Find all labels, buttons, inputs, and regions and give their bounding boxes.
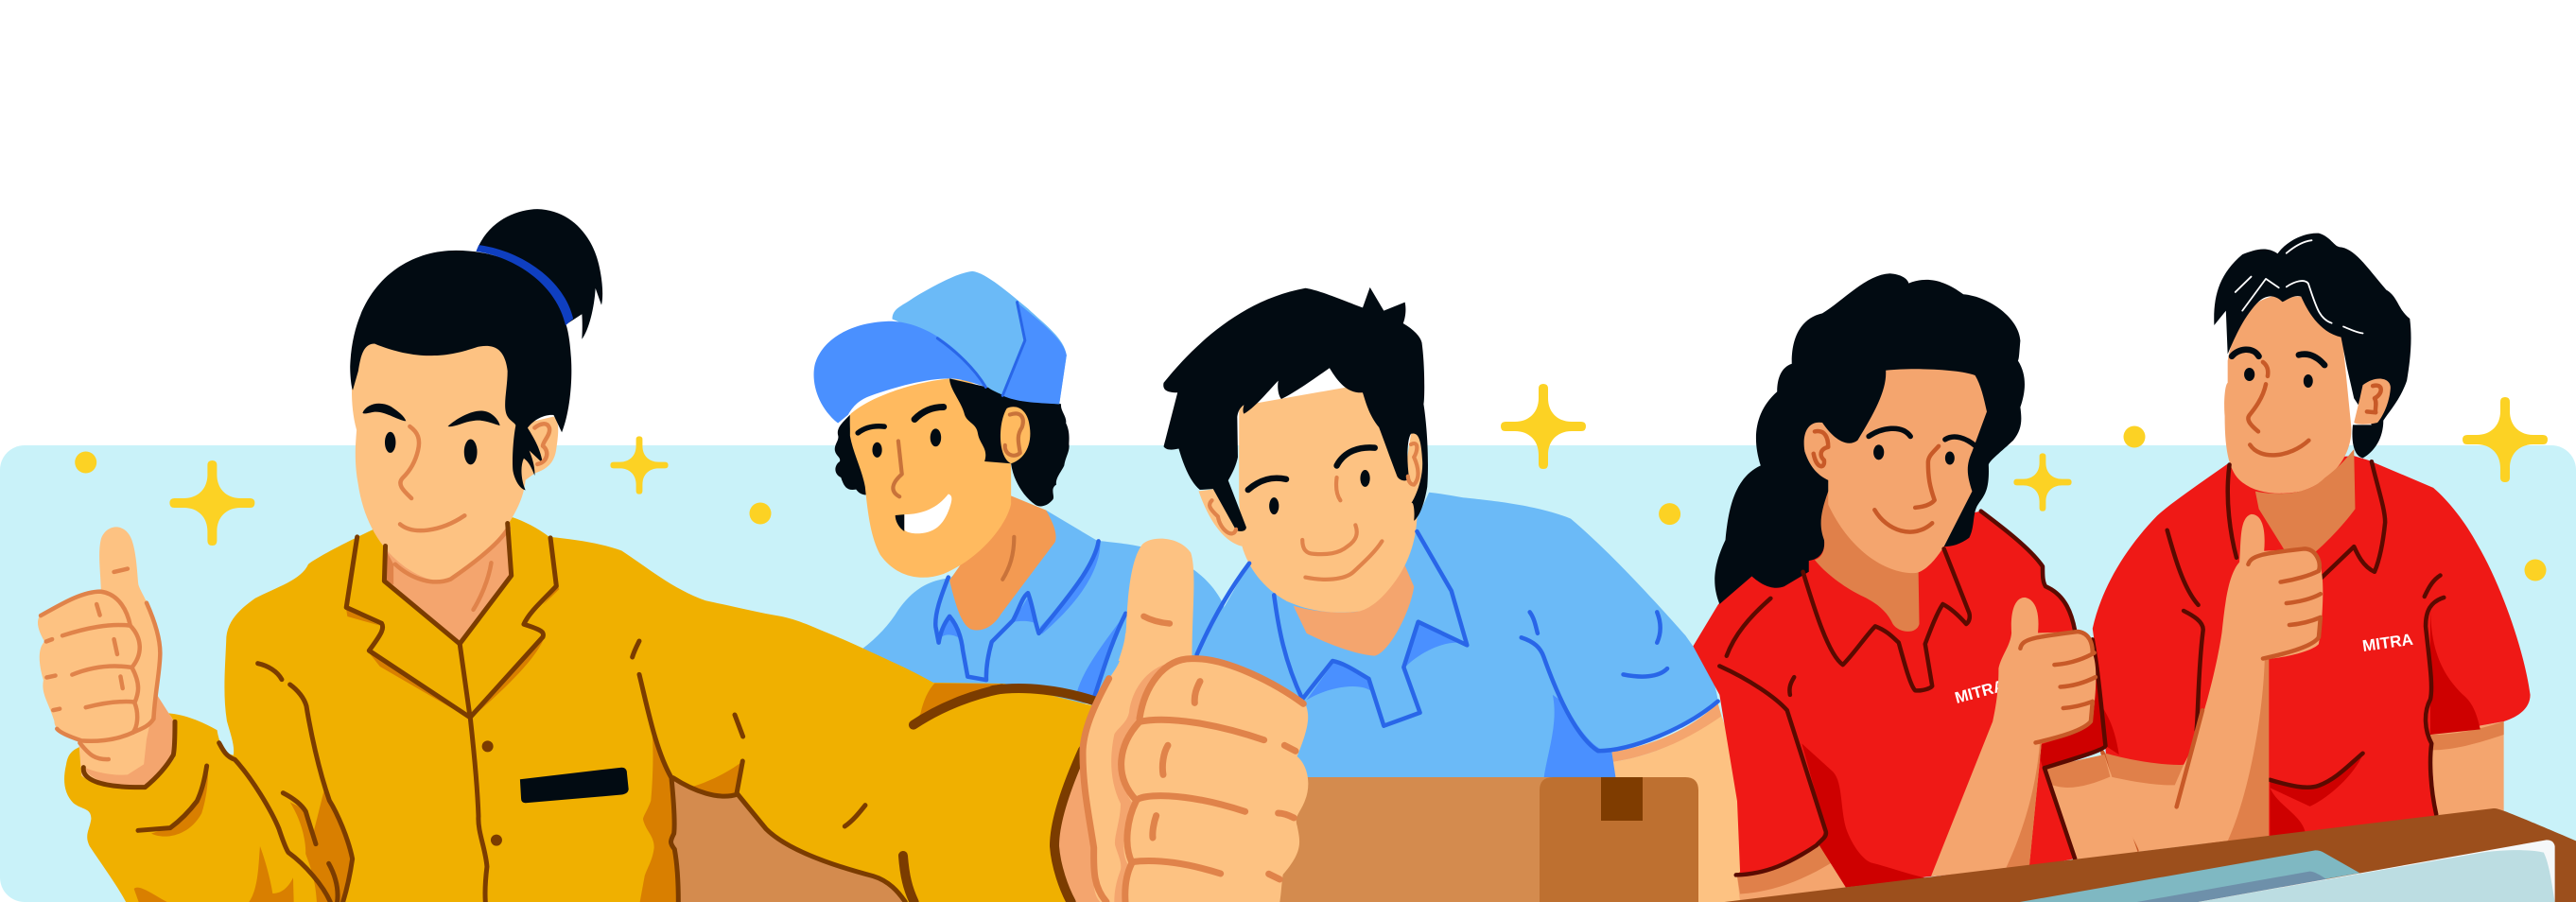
arm and fist	[1931, 598, 2096, 876]
eyes	[2244, 368, 2313, 388]
ear	[2354, 378, 2391, 425]
face	[1804, 369, 1987, 573]
hair band	[476, 245, 573, 325]
hair	[1163, 287, 1428, 531]
pale blue background panel	[0, 445, 2576, 902]
jacket buttons	[482, 740, 502, 846]
cardboard box	[1229, 777, 1698, 902]
sleeve underside	[1611, 703, 1721, 762]
hair	[350, 251, 571, 490]
nose, smile and ear lines	[1814, 431, 1939, 532]
eyes	[1873, 444, 1955, 464]
red shirt	[2093, 456, 2531, 850]
paper white	[2198, 840, 2555, 902]
ear right shade	[1401, 474, 1411, 516]
cap man face	[850, 378, 1011, 578]
shirt lines	[1197, 531, 1718, 751]
thumb	[1119, 539, 1193, 661]
shirt side shadow	[1543, 695, 1616, 780]
cuff outlines	[993, 688, 1095, 902]
eyebrows	[2232, 350, 2324, 365]
box front panel	[1540, 777, 1698, 902]
neck	[384, 523, 512, 644]
arm lines	[633, 641, 905, 902]
nose, smile and ear lines	[2248, 362, 2381, 455]
cap man neck	[949, 495, 1056, 631]
jacket extended arm	[757, 616, 1095, 902]
eyes	[1269, 470, 1370, 514]
finger lines	[2020, 632, 2096, 742]
collar lines	[346, 523, 556, 718]
cap man shirt	[847, 511, 1224, 703]
eyebrows	[1869, 428, 1976, 446]
wrist shade	[82, 694, 175, 789]
desk with glass display	[1725, 808, 2576, 902]
decorative sparkles and dots	[75, 384, 2548, 581]
shirt shadow	[1801, 743, 1928, 888]
wrist	[1053, 750, 1119, 902]
shirt	[1197, 493, 1718, 780]
person: woman in yellow jacket	[38, 209, 1308, 902]
cap seams	[937, 303, 1025, 395]
box seen under arm	[671, 779, 906, 902]
jacket shadows lower left	[134, 772, 353, 902]
lower sleeve cuff	[1737, 845, 1831, 894]
finger lines	[1083, 659, 1303, 902]
left cuff line	[83, 721, 175, 788]
cap man eyes	[872, 428, 941, 458]
side shadow	[640, 731, 679, 902]
jacket body	[64, 517, 851, 902]
cap side panel	[1002, 303, 1067, 404]
shirt lines	[2167, 461, 2444, 814]
box side	[1229, 777, 1551, 902]
face	[2224, 297, 2351, 494]
cap man hair left	[835, 415, 868, 494]
name tag	[520, 768, 629, 803]
sleeve cuff	[2430, 721, 2504, 750]
cuff shadow	[914, 684, 1002, 725]
cap man hair right	[949, 378, 1070, 506]
cap man eyebrows	[858, 407, 944, 433]
raised arm and thumb	[2101, 514, 2323, 852]
cap man nose and ear lines	[893, 413, 1023, 580]
arm shadow	[2006, 743, 2042, 867]
eyebrows	[1248, 447, 1375, 490]
fist shade	[1111, 662, 1179, 902]
lower left sleeve skin	[1737, 845, 1846, 902]
hair highlights	[2236, 240, 2363, 333]
lapel shadows	[346, 586, 559, 719]
eyebrows	[362, 404, 500, 426]
neck	[1294, 565, 1414, 656]
arm shadow	[2228, 659, 2269, 841]
woman arm and thumbs-up hand	[1931, 598, 2096, 876]
forearm cuff	[2043, 755, 2110, 788]
display lid	[2020, 850, 2359, 902]
cap man collar shadows	[941, 542, 1125, 699]
woman forearm behind	[2043, 755, 2138, 860]
nose, mouth and ear lines	[1210, 443, 1419, 580]
face	[1239, 385, 1418, 613]
jacket lines lower left	[138, 664, 487, 902]
pocket shadow	[2270, 755, 2363, 807]
neck shadow	[384, 546, 393, 584]
cap man collar lines	[935, 541, 1125, 697]
hair	[1714, 273, 2025, 604]
neck	[1815, 492, 1920, 632]
shirt shadow	[2430, 602, 2480, 735]
hair	[2214, 234, 2411, 458]
eyes	[385, 432, 478, 464]
hand lines	[2102, 548, 2321, 851]
cap visor	[814, 321, 985, 424]
big thumbs-up hand	[993, 539, 1308, 902]
paper tint	[2198, 850, 2555, 902]
logo: MITRA on woman shirt: MITRA	[1953, 677, 2007, 707]
left hand finger lines	[41, 569, 160, 759]
shirt fold shadow	[2270, 788, 2306, 837]
elbow shadow	[693, 763, 740, 796]
display inner	[2137, 872, 2326, 902]
ear right	[1405, 433, 1423, 504]
logo: MITRA on red shirt: MITRA	[2361, 631, 2414, 655]
person: man in blue shirt	[1163, 287, 1765, 902]
red shirt	[1693, 512, 2105, 888]
box tape	[1601, 777, 1643, 821]
shirt lines	[1719, 512, 2105, 875]
cap crown	[893, 271, 1067, 404]
sleeve shadow	[2037, 637, 2119, 768]
person: delivery man with blue cap	[814, 271, 1224, 703]
bun	[477, 209, 602, 339]
cap man ear	[1001, 407, 1030, 463]
thumb nail line	[1143, 616, 1170, 623]
thick fold lines	[903, 688, 1002, 902]
person: man in red shirt	[2093, 234, 2531, 852]
face	[352, 339, 558, 581]
right arm	[2430, 721, 2504, 827]
ear left	[1199, 489, 1242, 546]
neck	[2255, 449, 2355, 554]
collar shadows	[1307, 623, 1465, 700]
head and collar	[38, 209, 629, 803]
desk top	[1725, 808, 2576, 902]
jacket side and box patch	[633, 641, 1002, 902]
fist	[1083, 633, 1308, 902]
upper sleeve cuff	[2102, 753, 2184, 785]
person: woman in red shirt	[1693, 273, 2138, 902]
forearm	[1601, 716, 1765, 902]
left thumbs-up hand	[38, 527, 175, 789]
nose, smile, ear and chin lines	[395, 424, 549, 610]
cap man smile	[896, 494, 951, 533]
